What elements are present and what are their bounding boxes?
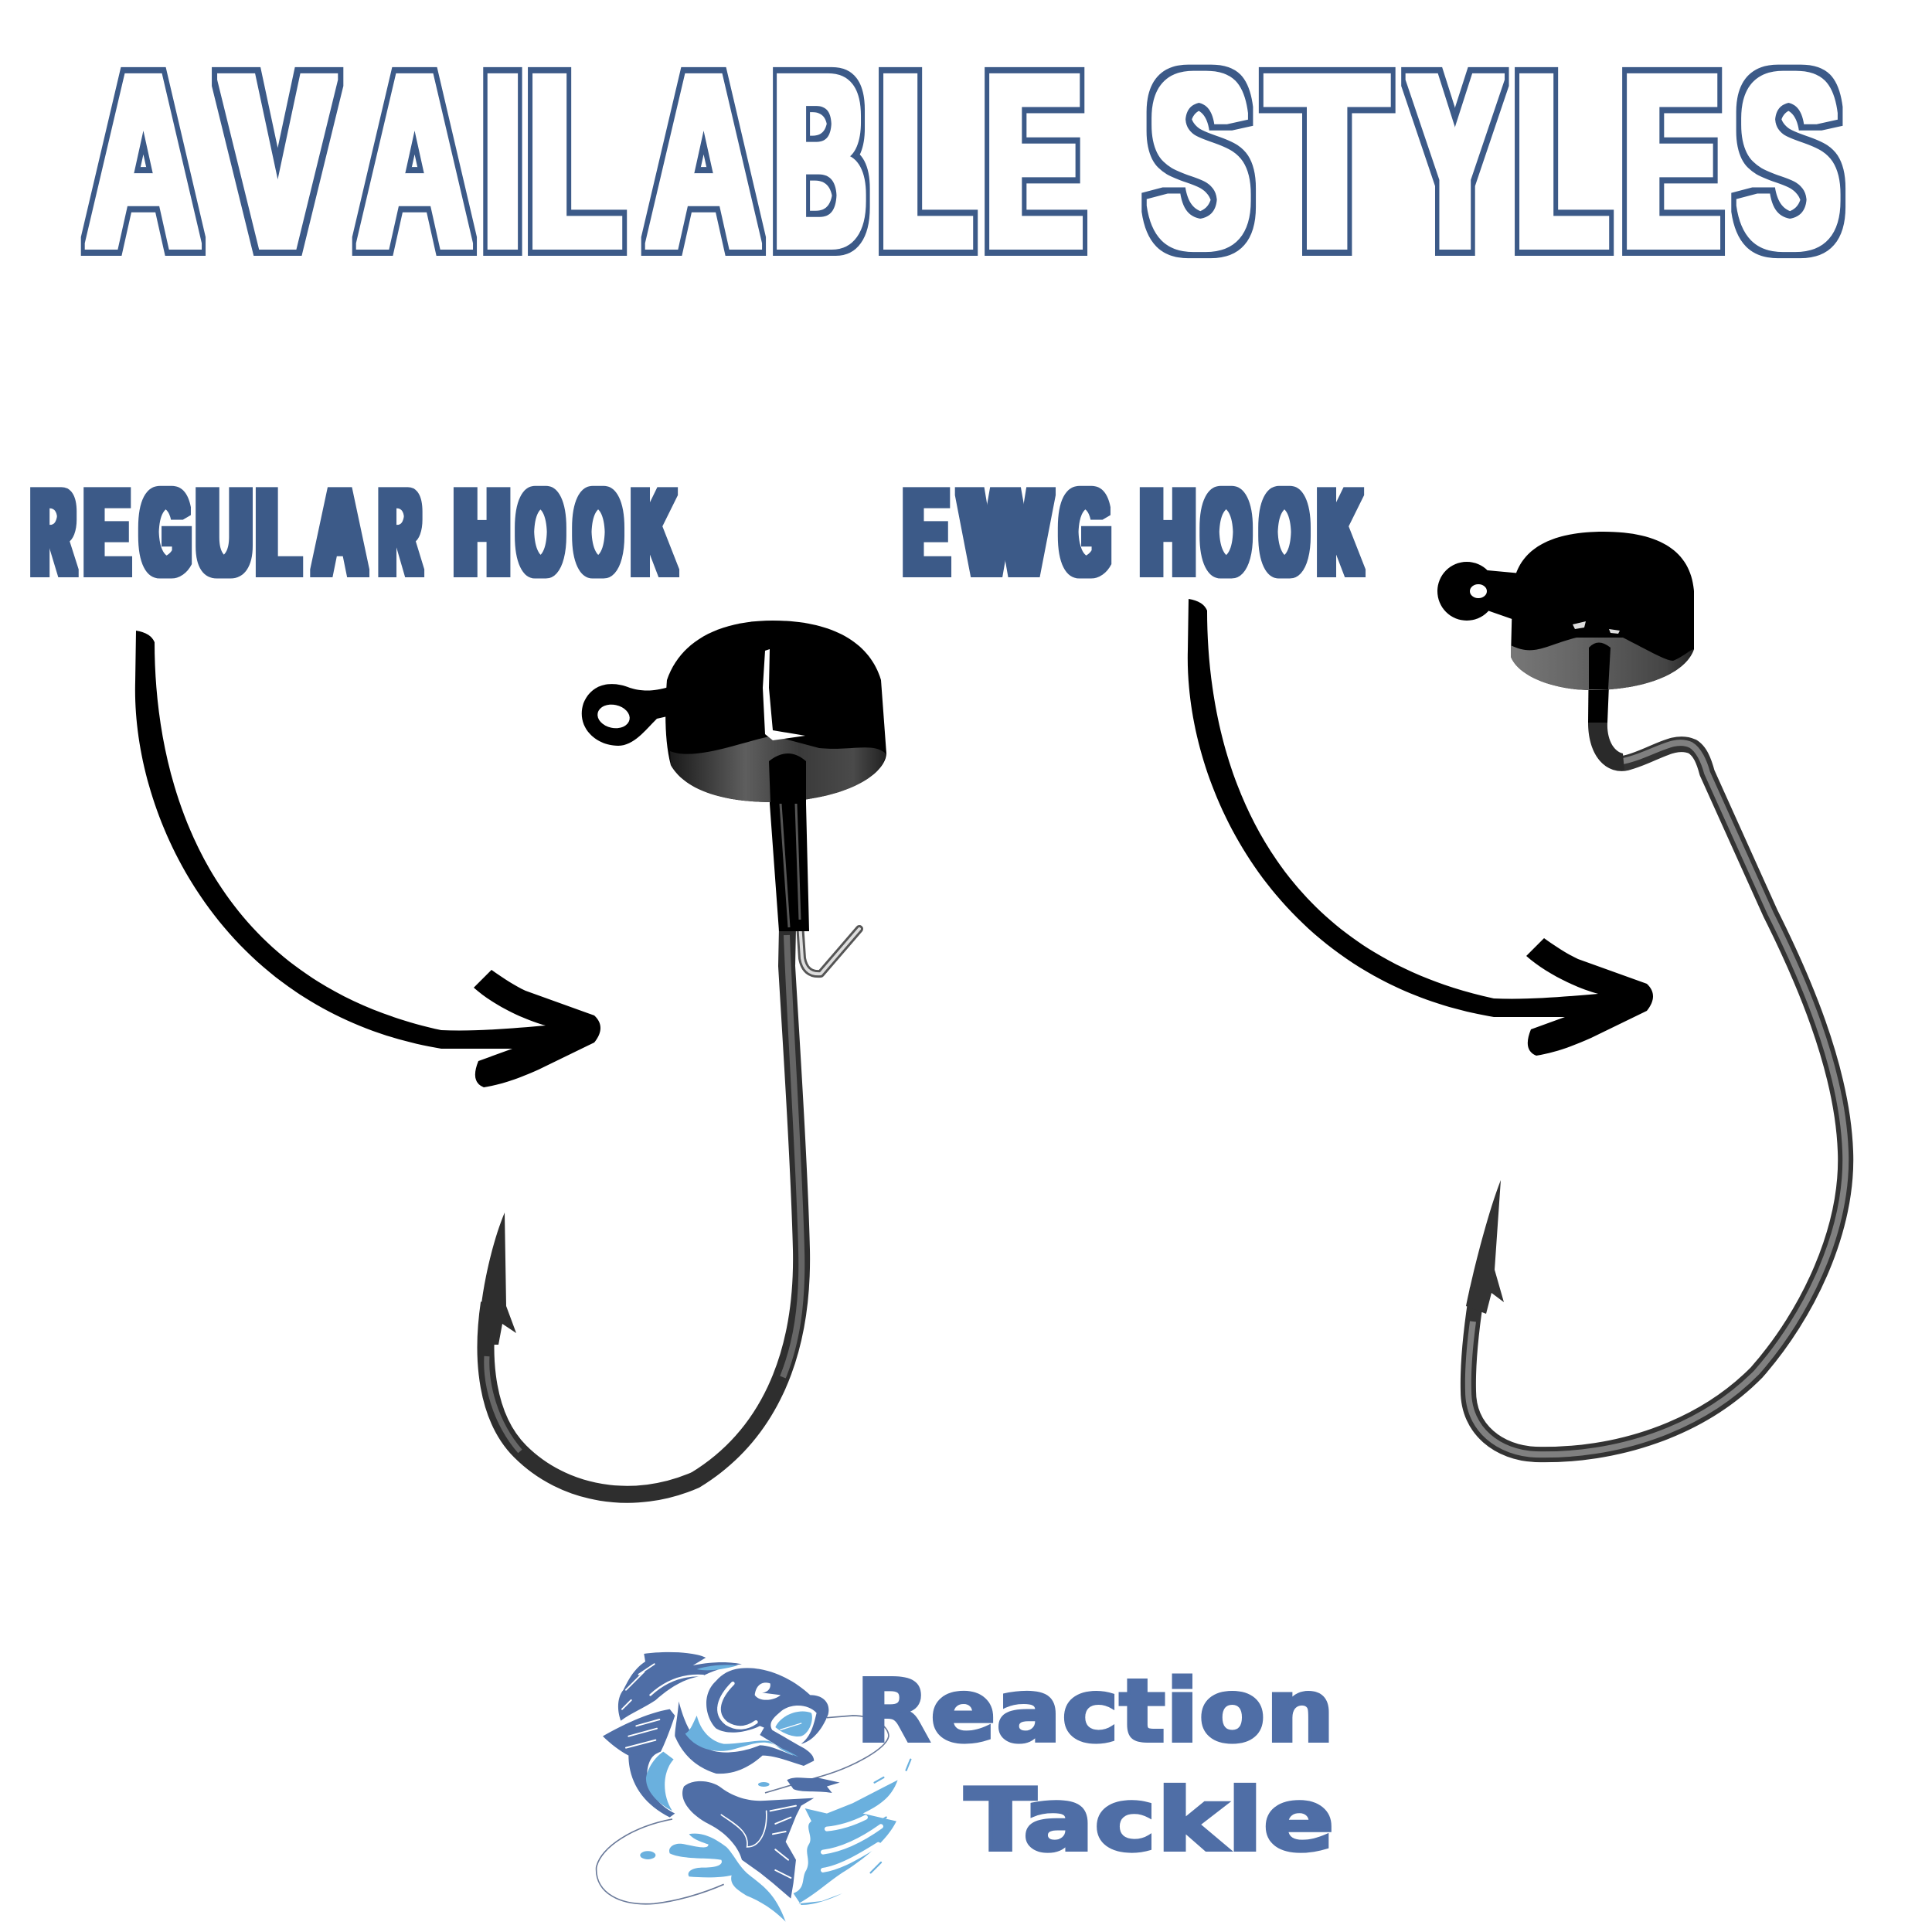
heading: ewg hook — [903, 465, 1366, 599]
belly and tail — [682, 1781, 814, 1899]
jaw — [675, 1702, 814, 1774]
arrow: to ewg hook — [1188, 599, 1653, 1056]
title: A — [86, 22, 201, 299]
head — [706, 1668, 828, 1744]
fish eye — [755, 1682, 781, 1700]
offset wide gap wire — [1468, 723, 1845, 1454]
black coated shank — [1588, 643, 1611, 723]
jig head underside — [1511, 638, 1694, 690]
head highlights — [1573, 621, 1620, 634]
heading: ewg hook: O — [1202, 465, 1250, 599]
lure — [787, 1777, 840, 1793]
heading: regular hook: R — [32, 465, 74, 599]
jig head underside — [670, 736, 886, 802]
heading: ewg hook: E — [904, 465, 948, 599]
title: Y — [1409, 22, 1502, 299]
heading: ewg hook: O — [1261, 465, 1308, 599]
logo fish — [597, 1652, 910, 1922]
heading: regular hook: K — [632, 465, 675, 599]
heading: regular hook: A — [315, 465, 365, 599]
title: L — [529, 22, 621, 299]
fish light accents — [646, 1665, 812, 1811]
title: E — [985, 22, 1083, 299]
logo: reaction tackle — [597, 1652, 1335, 1922]
title: I — [484, 22, 522, 299]
pectoral fin — [603, 1709, 675, 1756]
black coated shank — [769, 753, 809, 931]
jig head — [665, 621, 886, 802]
title: V — [223, 22, 332, 299]
logo wordmark: reaction: Reaction — [855, 1662, 1335, 1762]
heading: ewg hook: H — [1141, 465, 1194, 599]
title: S — [1738, 22, 1840, 299]
title: A — [646, 22, 761, 299]
title: T — [1267, 22, 1386, 299]
line eye — [582, 684, 674, 746]
heading: regular hook: L — [257, 465, 299, 599]
swoosh — [597, 1819, 724, 1904]
heading: ewg hook: W — [963, 465, 1048, 599]
heading: regular hook: O — [518, 465, 563, 599]
line eye — [1437, 562, 1521, 622]
title: A — [357, 22, 472, 299]
hook: regular jig — [479, 621, 886, 1495]
fish white details — [622, 1664, 801, 1878]
hook wire — [486, 927, 801, 1495]
heading: regular hook: U — [198, 465, 250, 599]
arrow: to regular hook — [135, 631, 600, 1087]
hook point and barb — [1466, 1180, 1504, 1314]
back — [628, 1752, 675, 1818]
heading: regular hook: R — [379, 465, 420, 599]
title: E — [1623, 22, 1720, 299]
hook point and barb — [479, 1213, 516, 1345]
title: B — [774, 22, 866, 299]
fishing line — [765, 1716, 889, 1793]
heading: regular hook — [30, 465, 680, 599]
title: S — [1148, 22, 1250, 299]
head highlight — [763, 649, 805, 740]
splash — [640, 1780, 898, 1922]
hook: ewg jig — [1437, 532, 1845, 1454]
heading: ewg hook: K — [1318, 465, 1361, 599]
title — [80, 22, 1845, 299]
title: L — [1515, 22, 1607, 299]
heading: regular hook: E — [85, 465, 129, 599]
heading: regular hook: O — [575, 465, 621, 599]
keeper wire — [799, 912, 859, 974]
dorsal fin — [618, 1652, 742, 1721]
heading: ewg hook: G — [1061, 465, 1110, 599]
heading: regular hook: G — [141, 465, 190, 599]
jig head — [1511, 532, 1694, 690]
logo wordmark: tackle: Tackle — [964, 1770, 1335, 1871]
heading: regular hook: H — [455, 465, 509, 599]
title: L — [879, 22, 971, 299]
